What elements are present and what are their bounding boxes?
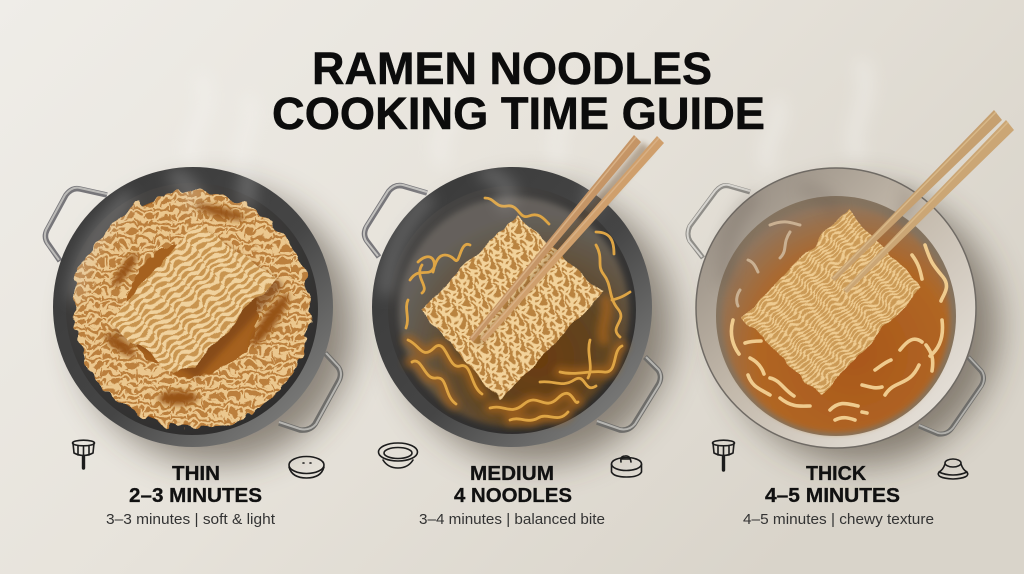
panel: thick noodles pan: [688, 60, 1014, 464]
broth pools around block: [102, 200, 294, 405]
pale noodles at upper left: [737, 222, 800, 306]
pan interior: [66, 183, 318, 435]
noodle block: [108, 223, 275, 372]
pan shadow: [722, 188, 998, 464]
pan interior: [388, 186, 636, 434]
caption: thin: 2–3 MINUTES: [129, 485, 262, 507]
shadow under noodle block: [114, 232, 284, 378]
chopsticks: [831, 110, 1014, 293]
title: [272, 43, 765, 139]
title: RAMEN NOODLES: [312, 43, 712, 94]
panel: thin noodles pan: [45, 75, 354, 464]
left handle: [364, 185, 427, 257]
icon: stacked noodle cake, thick: [938, 459, 968, 479]
caption: medium: [419, 463, 605, 528]
noodle block: [420, 215, 603, 400]
caption: thin: 3–3 minutes | soft & light: [106, 512, 275, 528]
left handle: [45, 188, 107, 261]
icon: bowl, thin: [289, 456, 324, 478]
chopsticks: [469, 135, 664, 344]
right handle: [919, 357, 984, 434]
steam above pan: [439, 80, 564, 165]
icon: noodle press, thin: [72, 440, 94, 468]
panel: medium noodles pan: [364, 80, 673, 464]
pan rim: [696, 168, 976, 448]
steam above pan: [766, 60, 866, 170]
steam over pan: [385, 172, 595, 295]
caption: thin: [106, 463, 275, 528]
left handle: [688, 185, 750, 258]
caption: medium: 4 NOODLES: [454, 485, 572, 507]
steam above pan: [190, 75, 251, 175]
caption: thick: [743, 463, 934, 528]
loose thick noodles: [731, 245, 946, 420]
caption: thick: 4–5 MINUTES: [765, 485, 900, 507]
caption: thick: 4–5 minutes | chewy texture: [743, 512, 934, 528]
caption: medium: 3–4 minutes | balanced bite: [419, 512, 605, 528]
pan rim: [372, 167, 652, 447]
icon: shallow bowl, medium: [378, 443, 418, 468]
title: COOKING TIME GUIDE: [272, 88, 765, 139]
caption: thin: THIN: [172, 463, 220, 485]
steam over pan: [725, 190, 907, 285]
caption: medium: MEDIUM: [470, 463, 554, 485]
ring of thin noodles: [100, 218, 284, 402]
broth: [77, 195, 307, 425]
noodle block: [742, 210, 922, 395]
pan rim: [53, 167, 333, 447]
icon: noodle cake, medium: [612, 456, 642, 477]
pan interior wall: [716, 196, 956, 436]
broth: [399, 197, 629, 427]
caption: thick: THICK: [806, 463, 867, 485]
right handle: [279, 353, 341, 430]
right handle: [597, 357, 661, 430]
broth: [722, 205, 950, 433]
pan shadow: [78, 188, 354, 464]
loose noodles: [406, 198, 630, 420]
icon: noodle press, thick: [712, 440, 734, 470]
amber glow around noodles: [408, 300, 622, 420]
pan shadow: [397, 188, 673, 464]
steam over pan: [75, 165, 252, 300]
